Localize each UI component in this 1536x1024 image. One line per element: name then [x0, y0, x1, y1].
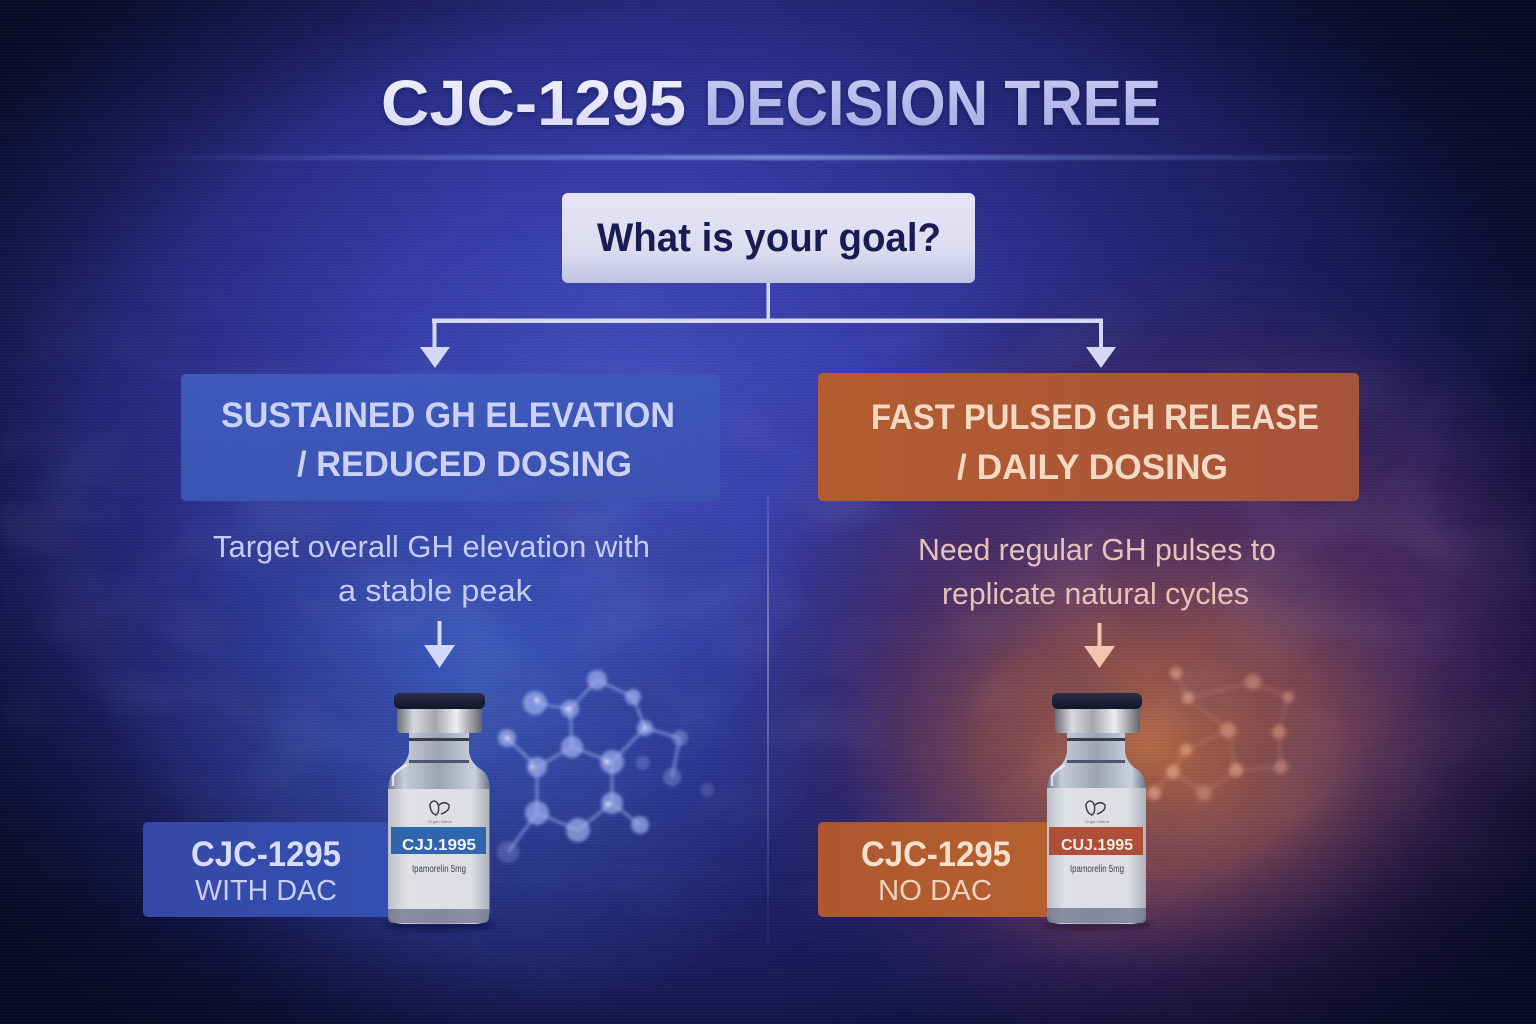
badge: CJC-1295 no DAC: CJC-1295: [861, 835, 1011, 874]
vial: with DAC: [383, 693, 495, 931]
vial: no DAC: Ipamorelin 5mg: [1070, 864, 1124, 875]
title: DECISION TREE: [704, 67, 1161, 139]
title divider glow: [130, 155, 1410, 160]
vial: with DAC: CJJ.1995: [402, 837, 476, 854]
left description: [213, 529, 650, 608]
badge: CJC-1295 with DAC: [143, 822, 398, 917]
badge: CJC-1295 no DAC: [818, 822, 1050, 917]
left description: a stable peak: [338, 573, 533, 608]
right description: Need regular GH pulses to: [918, 532, 1276, 567]
left description: Target overall GH elevation with: [213, 529, 650, 564]
panel: sustained GH elevation: [181, 374, 720, 501]
vial: no DAC: CUJ.1995: [1061, 837, 1133, 854]
branch connector arrows: [420, 283, 1116, 368]
arrow: right down: [1084, 623, 1115, 668]
panel: fast pulsed GH release: / DAILY DOSING: [957, 448, 1228, 487]
title: CJC-1295: [381, 67, 686, 139]
badge: CJC-1295 with DAC: CJC-1295: [191, 835, 341, 874]
panel: sustained GH elevation: / REDUCED DOSING: [297, 445, 632, 484]
center vertical divider: [767, 495, 769, 965]
badge: CJC-1295 no DAC: NO DAC: [878, 875, 992, 907]
molecule network: right: [1147, 667, 1294, 801]
title: [381, 67, 1161, 139]
arrow: left down: [424, 621, 455, 668]
panel: sustained GH elevation: SUSTAINED GH ELEVATION: [221, 396, 675, 435]
vial: with DAC: Ipamorelin 5mg: [412, 864, 466, 875]
vial: with DAC: Organ Name: [428, 819, 453, 824]
molecule network: left: [497, 670, 714, 863]
panel: fast pulsed GH release: FAST PULSED GH RELEASE: [871, 398, 1319, 437]
right description: replicate natural cycles: [942, 576, 1249, 611]
question box: What is your goal?: [597, 216, 941, 260]
right description: [918, 532, 1276, 611]
question box: [562, 193, 975, 283]
badge: CJC-1295 with DAC: WITH DAC: [195, 875, 337, 907]
vial: no DAC: Organ Name: [1085, 819, 1110, 824]
panel: fast pulsed GH release: [818, 373, 1359, 501]
vial: no DAC: [1041, 693, 1153, 931]
